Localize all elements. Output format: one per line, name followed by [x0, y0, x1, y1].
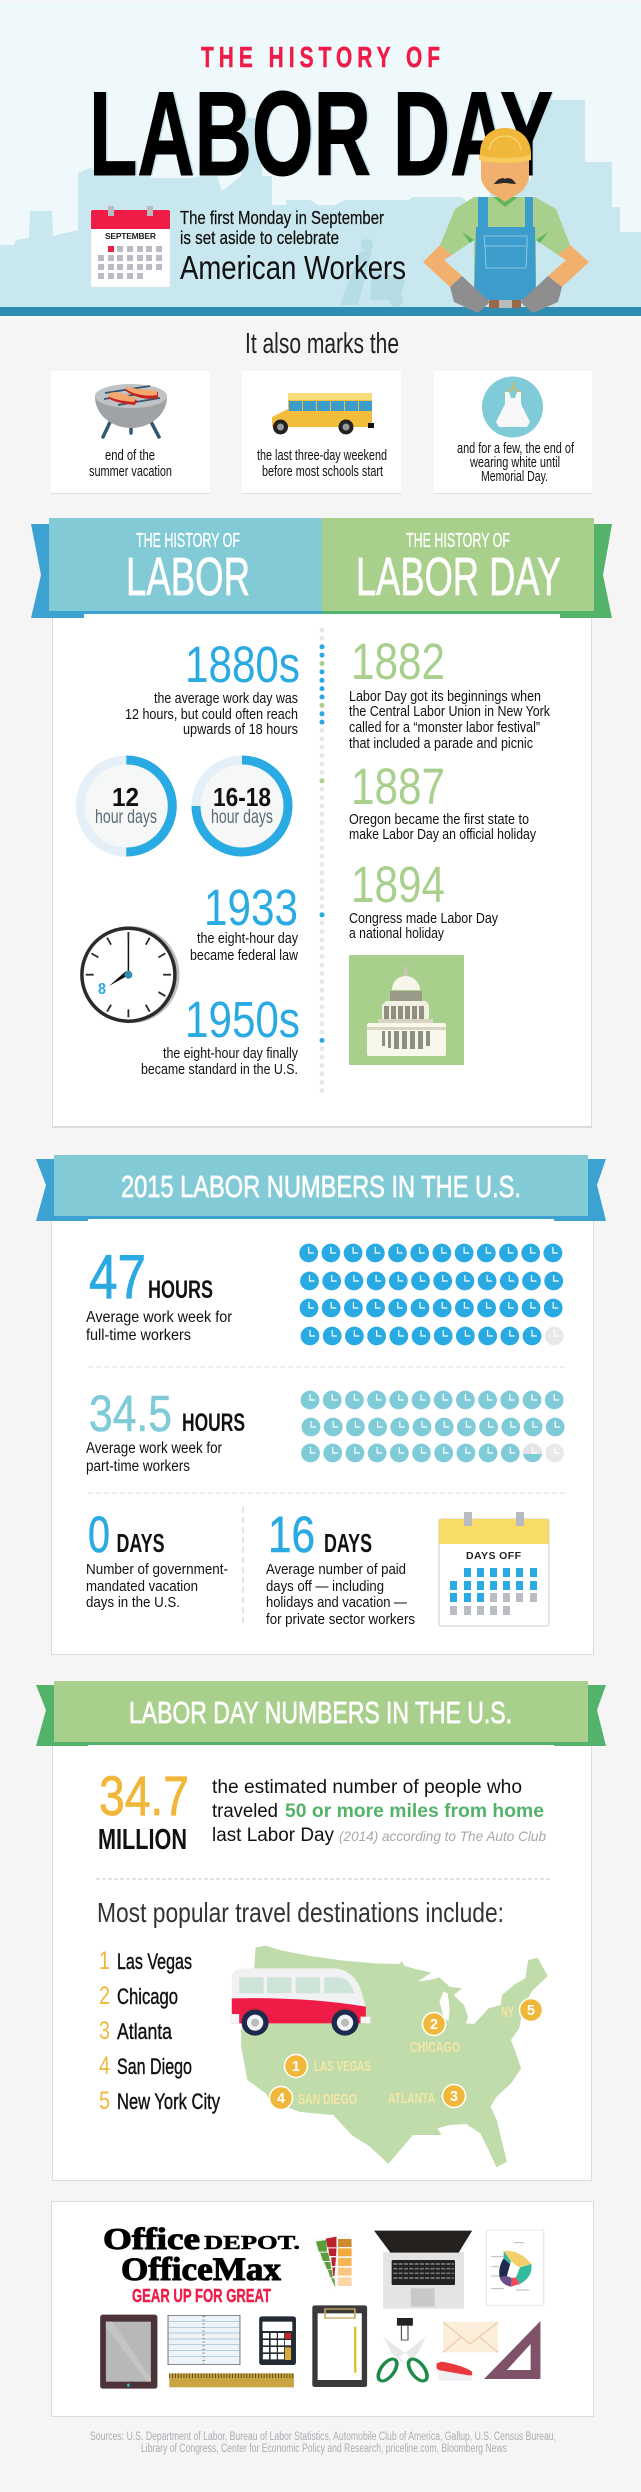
- icon: days off calendar: DAYS OFF: [466, 1550, 522, 1562]
- stat: 47 hours: full-time workers: [86, 1327, 191, 1344]
- list: destinations: New York City: [117, 2089, 220, 2114]
- stat: 16 days: days off — including: [266, 1578, 384, 1595]
- banner: history of labor / labor day: [31, 518, 612, 618]
- icon: clock: [82, 926, 180, 1023]
- stat: 0 days: [86, 1506, 228, 1611]
- icon: scissors and binder clip: [374, 2318, 431, 2383]
- 1933: became federal law: [190, 947, 298, 964]
- stat: 0 days: days in the U.S.: [86, 1594, 180, 1611]
- 1933: [190, 879, 298, 964]
- donut: 12 hour days: [80, 760, 172, 852]
- heading right: [356, 530, 561, 607]
- stat: 34.5 hours: [86, 1385, 245, 1475]
- 1880s: 1880s: [185, 636, 300, 693]
- 1882: 1882: [351, 633, 445, 690]
- icon: clock: 8: [98, 981, 106, 998]
- 1950s: became standard in the U.S.: [141, 1061, 298, 1078]
- icon: dress: [482, 376, 543, 438]
- list: destinations: San Diego: [117, 2054, 192, 2079]
- stat: 34.7 million: [98, 1764, 189, 1856]
- sources: Library of Congress, Center for Economic Policy and Research, priceline.com, Bloomberg News: [141, 2443, 507, 2455]
- map: united states: [241, 1946, 548, 2167]
- stat: 47 hours: Average work week for: [86, 1309, 232, 1326]
- map pins and labels: 4: [277, 2090, 286, 2107]
- icon: tablet: [100, 2315, 157, 2389]
- text: Memorial Day.: [481, 468, 548, 485]
- list: destinations: Atlanta: [117, 2019, 173, 2044]
- stat: 47 hours: 47: [89, 1243, 146, 1312]
- map pins and labels: 2: [430, 2016, 438, 2033]
- 1933: 1933: [204, 879, 298, 936]
- list: destinations: 2: [99, 1982, 110, 2010]
- calendar: september: SEPTEMBER: [105, 231, 156, 241]
- stat: 47 hours: [86, 1243, 232, 1344]
- icon: bus: [272, 393, 374, 434]
- stat: 34.5 hours: HOURS: [182, 1409, 245, 1437]
- map pins and labels: LAS VEGAS: [314, 2058, 371, 2075]
- logo: GEAR UP FOR GREAT: [132, 2286, 271, 2306]
- travel text: [212, 1777, 546, 1846]
- list: destinations: Chicago: [117, 1984, 178, 2009]
- 1882: that included a parade and picnic: [349, 735, 533, 752]
- 1887: [349, 758, 536, 843]
- heading left: [126, 530, 250, 607]
- map pins and labels: 3: [450, 2088, 458, 2105]
- 1933: the eight-hour day: [197, 930, 298, 947]
- 1950s: 1950s: [185, 991, 300, 1048]
- heading left: LABOR: [126, 547, 250, 607]
- stat: 34.7 million: MILLION: [98, 1824, 187, 1856]
- map pins and labels: CHICAGO: [410, 2039, 460, 2056]
- donut: 16-18 hour days: [196, 760, 288, 852]
- stat: 16 days: 16: [268, 1506, 315, 1563]
- text: and for a few, the end of: [457, 440, 575, 457]
- icon: stapler: [437, 2362, 472, 2381]
- stat: 34.5 hours: Average work week for: [86, 1440, 222, 1457]
- panel: history timeline: [52, 614, 592, 1128]
- office supplies: [100, 2230, 544, 2389]
- bottom bar: [0, 307, 641, 316]
- panel: header: [0, 2, 641, 316]
- 1894: [349, 856, 498, 942]
- icon: ruler: [169, 2373, 294, 2387]
- stat: 0 days: mandated vacation: [86, 1578, 198, 1595]
- donut: 12 hour days: hour days: [95, 807, 157, 828]
- logo: DEPOT.: [204, 2232, 300, 2254]
- clock grid: 34.5 of 36: [301, 1391, 565, 1462]
- card: school bus: [242, 371, 401, 494]
- icon: capitol: [349, 955, 464, 1065]
- icon: laptop: [374, 2231, 472, 2309]
- stat: 34.5 hours: 34.5: [89, 1385, 172, 1442]
- title: the history of: THE HISTORY OF: [201, 42, 440, 74]
- map pins and labels: 5: [527, 2002, 535, 2019]
- icon: chart page: [486, 2230, 544, 2305]
- map pins and labels: NY: [501, 2004, 514, 2021]
- header text: American Workers: [180, 249, 406, 286]
- text: summer vacation: [89, 463, 172, 480]
- stat: 34.7 million: 34.7: [99, 1764, 189, 1827]
- card: white dress: [434, 371, 592, 494]
- text: before most schools start: [262, 463, 384, 480]
- panel: labor day numbers: [52, 1745, 592, 2181]
- banner: labor day numbers: [36, 1681, 606, 1746]
- stat: 16 days: Average number of paid: [266, 1561, 406, 1578]
- header text: is set aside to celebrate: [180, 228, 339, 248]
- 1887: 1887: [351, 758, 445, 815]
- heading right: THE HISTORY OF: [406, 530, 510, 552]
- map pins and labels: SAN DIEGO: [298, 2091, 357, 2108]
- 1894: Congress made Labor Day: [349, 910, 498, 927]
- travel text: the estimated number of people who: [212, 1777, 522, 1798]
- list: destinations: 4: [99, 2052, 110, 2080]
- panel: office depot: [51, 2201, 594, 2417]
- logo: Office: [103, 2221, 200, 2256]
- travel text: last Labor Day: [212, 1825, 334, 1846]
- 1882: called for a “monster labor festival”: [349, 719, 540, 736]
- stat: 0 days: DAYS: [116, 1528, 164, 1558]
- stat: 16 days: DAYS: [324, 1528, 372, 1558]
- 1887: make Labor Day an official holiday: [349, 826, 536, 843]
- map pins and labels: [270, 1998, 542, 2110]
- map pins and labels: ATLANTA: [388, 2090, 435, 2107]
- calendar: september: [91, 206, 170, 287]
- icon: clipboard: [312, 2305, 367, 2387]
- text: [257, 447, 387, 480]
- 1880s: the average work day was: [154, 690, 298, 707]
- icon: days off calendar: [439, 1512, 549, 1626]
- stat: 16 days: for private sector workers: [266, 1611, 415, 1628]
- text: [89, 447, 172, 480]
- banner: labor day numbers: LABOR DAY NUMBERS IN THE U.S.: [129, 1695, 512, 1730]
- icon: envelope: [443, 2322, 498, 2352]
- donut: 16-18 hour days: hour days: [211, 807, 273, 828]
- list: destinations: 1: [99, 1947, 110, 1975]
- map pins and labels: 1: [292, 2058, 300, 2075]
- travel text: 50 or more miles from home: [285, 1801, 544, 1822]
- 1880s: upwards of 18 hours: [183, 721, 298, 738]
- timeline dots: [320, 630, 324, 1099]
- stat: 0 days: 0: [88, 1506, 110, 1563]
- travel text: traveled: [212, 1801, 278, 1822]
- text: the last three-day weekend: [257, 447, 387, 464]
- stat: 47 hours: HOURS: [148, 1276, 213, 1304]
- banner: 2015 labor numbers: [36, 1155, 606, 1221]
- donut: 12 hour days: 12: [112, 782, 139, 812]
- 1950s: the eight-hour day finally: [163, 1045, 298, 1062]
- 1950s: [141, 991, 300, 1078]
- clock grid: 47 of 48: [299, 1244, 564, 1345]
- text: wearing white until: [469, 454, 560, 471]
- heading: destinations: Most popular travel destinations include:: [97, 1897, 504, 1928]
- text: [457, 440, 575, 485]
- text: end of the: [105, 447, 155, 464]
- heading: it also marks the: It also marks the: [245, 328, 399, 360]
- 1882: Labor Day got its beginnings when: [349, 688, 541, 705]
- 1894: a national holiday: [349, 925, 444, 942]
- stat: 16 days: [266, 1506, 415, 1628]
- list: destinations: 5: [99, 2087, 110, 2115]
- stat: 0 days: Number of government-: [86, 1561, 228, 1578]
- travel text: (2014) according to The Auto Club: [339, 1828, 546, 1844]
- sources: [90, 2431, 556, 2455]
- donut: 16-18 hour days: 16-18: [213, 782, 271, 812]
- stat: 34.5 hours: part-time workers: [86, 1458, 190, 1475]
- icon: notebook: [168, 2315, 240, 2365]
- icon: triangle: [484, 2321, 540, 2379]
- header text: The first Monday in September: [180, 208, 384, 228]
- panel: 2015 labor numbers: [51, 1219, 594, 1655]
- icon: grill: [95, 384, 167, 437]
- header text: [180, 208, 406, 286]
- 1880s: 12 hours, but could often reach: [125, 706, 298, 723]
- list: destinations: [99, 1947, 220, 2115]
- stat: 16 days: holidays and vacation —: [266, 1594, 407, 1611]
- card: summer vacation: [51, 371, 210, 494]
- 1882: [349, 633, 550, 752]
- 1894: 1894: [351, 856, 445, 913]
- logo: [103, 2221, 300, 2306]
- icon: swatches: [313, 2233, 352, 2288]
- 1882: the Central Labor Union in New York: [349, 703, 550, 720]
- icon: worker with wheelbarrow silhouette: [340, 239, 405, 307]
- 1887: Oregon became the first state to: [349, 811, 529, 828]
- heading left: THE HISTORY OF: [136, 530, 240, 552]
- list: destinations: Las Vegas: [117, 1949, 192, 1974]
- illustration: worker: [423, 128, 589, 313]
- logo: OfficeMax: [121, 2252, 282, 2288]
- icon: van: [230, 1968, 370, 2036]
- list: destinations: 3: [99, 2017, 110, 2045]
- icon: calculator: [259, 2316, 296, 2365]
- 1880s: [125, 636, 300, 738]
- banner: 2015 labor numbers: 2015 LABOR NUMBERS IN THE U.S.: [121, 1169, 521, 1204]
- skyline: [0, 100, 641, 316]
